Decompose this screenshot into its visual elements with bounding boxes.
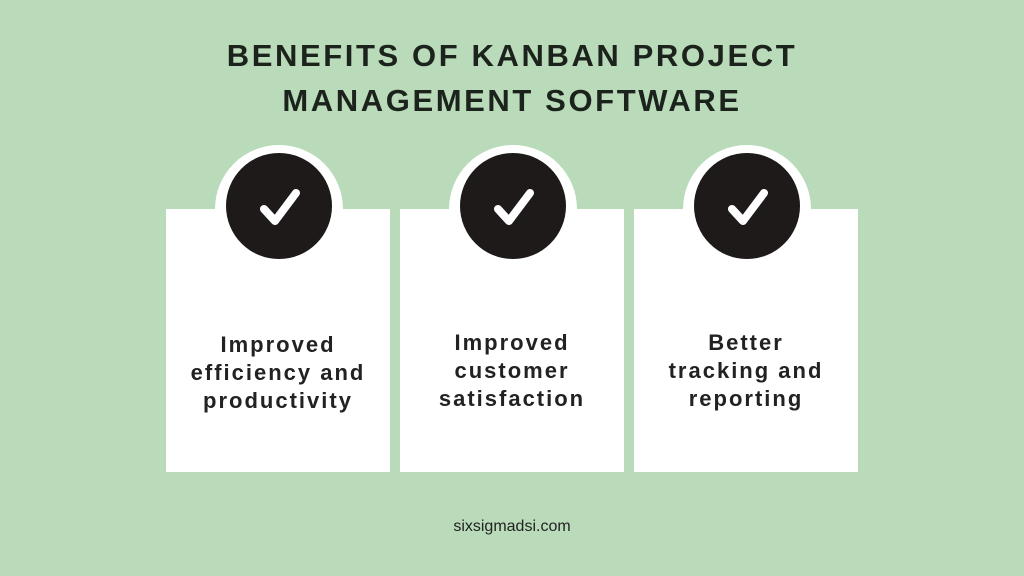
title: BENEFITS OF KANBAN PROJECT bbox=[227, 38, 797, 73]
text 2: satisfaction bbox=[439, 386, 585, 411]
footer: sixsigmadsi.com bbox=[453, 518, 571, 535]
text 3 bbox=[668, 330, 823, 411]
card 1 bbox=[166, 209, 390, 472]
text 2: customer bbox=[454, 358, 570, 383]
text 3: Better bbox=[708, 330, 784, 355]
text 1: Improved bbox=[220, 332, 336, 357]
icon ring 3 bbox=[683, 145, 811, 273]
title bbox=[227, 38, 797, 118]
text 1: efficiency and bbox=[191, 360, 365, 385]
text 3: reporting bbox=[689, 386, 803, 411]
text 2 bbox=[439, 330, 585, 411]
card 2 bbox=[400, 209, 624, 472]
text 2: Improved bbox=[454, 330, 570, 355]
icon: check 1 bbox=[226, 153, 332, 259]
text 3: tracking and bbox=[669, 358, 823, 383]
icon: check 3 bbox=[694, 153, 800, 259]
text 1: productivity bbox=[203, 388, 353, 413]
icon: check 2 bbox=[460, 153, 566, 259]
icon ring 1 bbox=[215, 145, 343, 273]
card 3 bbox=[634, 209, 858, 472]
text 1 bbox=[191, 332, 365, 413]
title: MANAGEMENT SOFTWARE bbox=[282, 83, 742, 118]
icon ring 2 bbox=[449, 145, 577, 273]
